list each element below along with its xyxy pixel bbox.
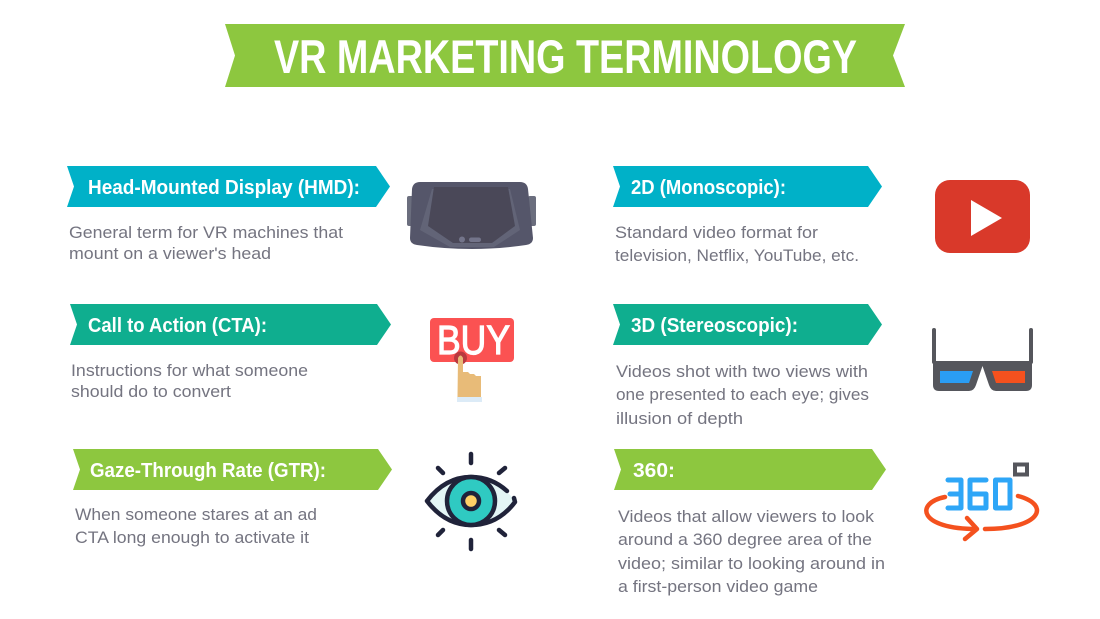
panel: call to action: should do to convert (71, 383, 231, 401)
panel: gaze-through rate (73, 449, 392, 547)
panel: call to action: Call to Action (CTA): (88, 315, 267, 337)
icon: buy button: BUY (437, 317, 510, 363)
panel: gaze-through rate: CTA long enough to activate it (75, 529, 309, 547)
title banner: VR MARKETING TERMINOLOGY (274, 30, 857, 83)
panel: 2D monoscopic: 2D (Monoscopic): (631, 177, 786, 199)
panel: 360: around a 360 degree area of the (618, 531, 872, 549)
panel: call to action (70, 304, 391, 401)
panel: 3D stereoscopic: 3D (Stereoscopic): (631, 315, 798, 337)
icon: buy button (430, 317, 514, 402)
panel: 360 (614, 449, 886, 596)
title banner (225, 24, 905, 87)
panel: head-mounted display: mount on a viewer's head (69, 245, 271, 263)
panel: head-mounted display: Head-Mounted Display (HMD): (88, 177, 360, 199)
panel: gaze-through rate: Gaze-Through Rate (GTR): (90, 460, 326, 482)
icon: eye (427, 454, 515, 549)
icon: 360 degree view (926, 464, 1037, 539)
panel: 3D stereoscopic: Videos shot with two views with (616, 363, 868, 381)
panel: 3D stereoscopic (613, 304, 882, 428)
icon: VR headset (407, 182, 536, 249)
panel: gaze-through rate: When someone stares at an ad (75, 506, 317, 524)
panel: 3D stereoscopic: illusion of depth (616, 410, 743, 428)
panel: 3D stereoscopic: one presented to each eye; gives (616, 386, 869, 404)
panel: head-mounted display: General term for VR machines that (69, 224, 343, 242)
panel: 2D monoscopic (613, 166, 882, 265)
panel: 360: Videos that allow viewers to look (618, 508, 875, 526)
panel: 2D monoscopic: television, Netflix, YouTube, etc. (615, 247, 859, 265)
panel: head-mounted display (67, 166, 390, 263)
panel: 2D monoscopic: Standard video format for (615, 224, 819, 242)
panel: 360: a first-person video game (618, 578, 818, 596)
panel: call to action: Instructions for what someone (71, 362, 308, 380)
icon: 3D glasses (932, 328, 1033, 391)
panel: 360: video; similar to looking around in (618, 555, 885, 573)
icon: video play button (935, 180, 1030, 253)
panel: 360: 360: (633, 460, 675, 482)
